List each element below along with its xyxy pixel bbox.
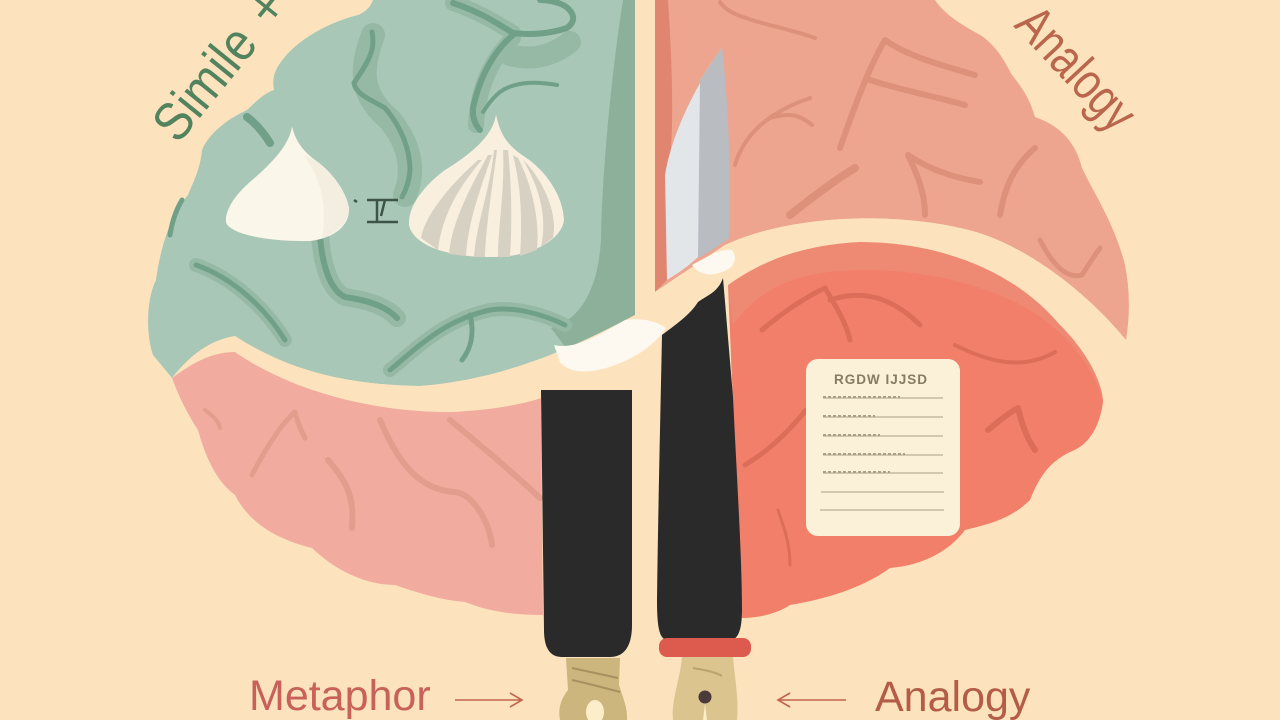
label: Analogy: Analogy (875, 673, 1031, 720)
label: Metaphor: Metaphor (249, 672, 431, 720)
card scribbles (823, 397, 905, 472)
veins: pink lobe (205, 410, 540, 545)
icon: right black knife handle with red collar (657, 278, 751, 720)
icon: white paint smears on the band (554, 250, 735, 371)
panel: pink lower-left brain lobe (172, 352, 543, 615)
icon: knife blade (665, 47, 730, 280)
panel: green upper-left brain lobe (148, 0, 635, 386)
arrow: Analogy to knife (778, 693, 846, 707)
icon: small equals-like glyph between bulbs (354, 200, 398, 222)
callout: note card (806, 359, 960, 536)
icon: plain white garlic bulb (226, 126, 349, 241)
veins: salmon lobe (720, 2, 1100, 276)
icon: striped garlic bulb (409, 114, 564, 257)
panel: coral lower-right brain lobe (728, 242, 1103, 618)
veins: green lobe dark core (170, 0, 573, 370)
decorative: cream band between lobes (235, 218, 1126, 412)
arrow: Metaphor to knife (455, 693, 522, 707)
panel: salmon upper-right brain lobe (655, 0, 1129, 340)
card heading: RGDW IJJSD (834, 372, 928, 387)
veins: green lobe soft shading (196, 3, 570, 370)
card lines (820, 398, 944, 510)
veins: coral lobe (745, 288, 1055, 565)
icon: left black knife handle (541, 390, 632, 720)
